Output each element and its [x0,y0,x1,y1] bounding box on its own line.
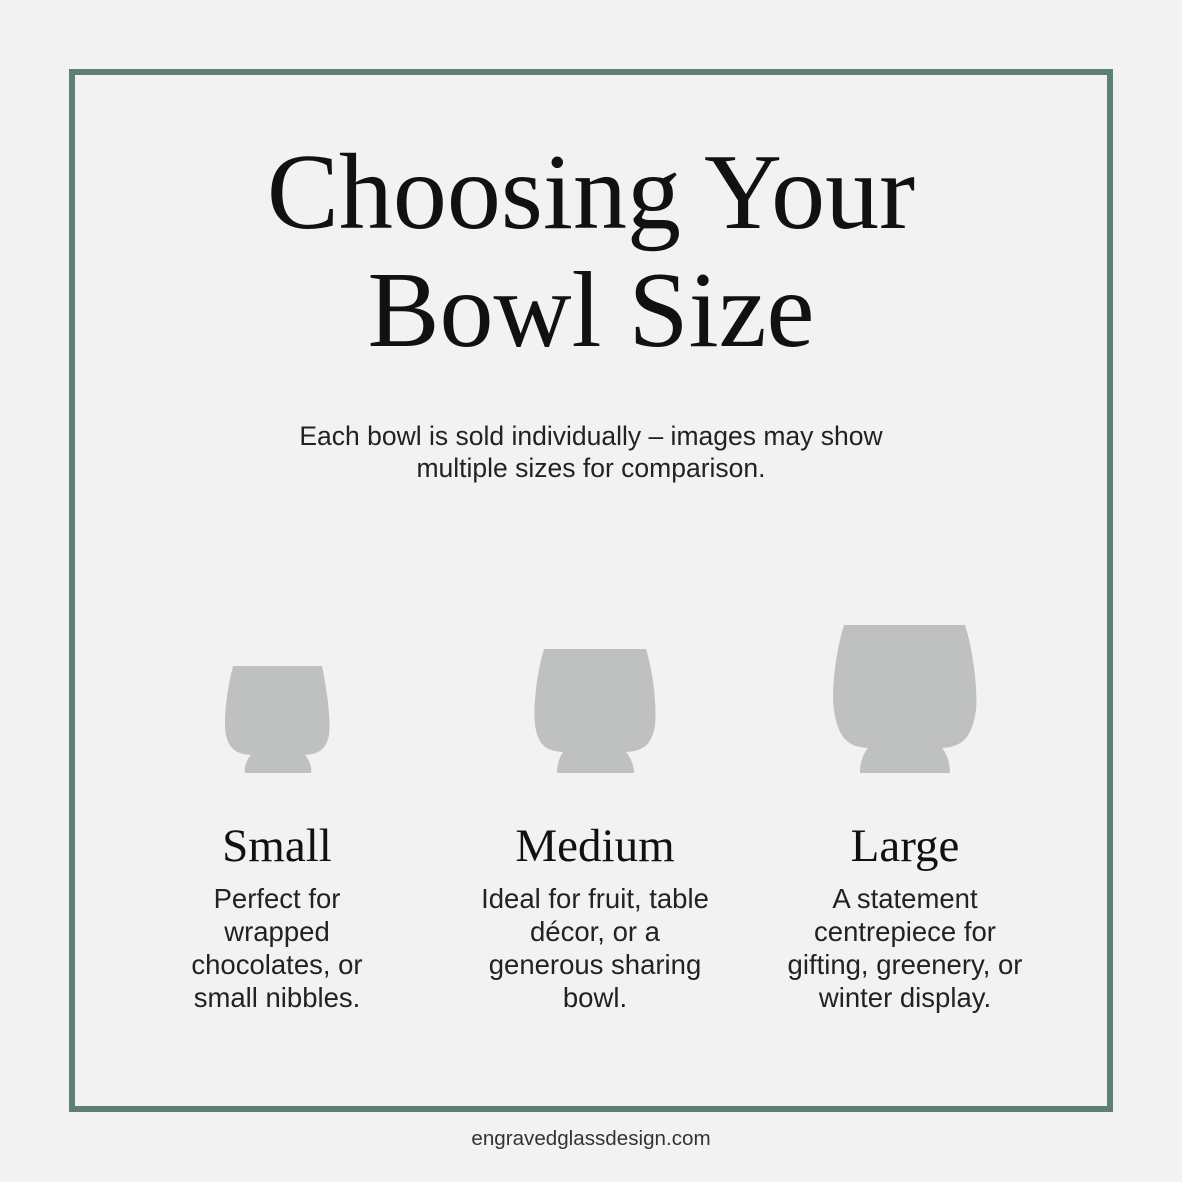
icon: medium bowl [534,649,656,773]
subtitle [299,421,883,483]
footer: engravedglassdesign.com [471,1127,711,1150]
title [267,133,915,370]
icon: large bowl [833,625,976,773]
column: small: chocolates, or [191,949,363,980]
column: large [788,820,1022,1013]
column: small: Perfect for [214,883,340,914]
subtitle: multiple sizes for comparison. [416,453,766,483]
subtitle: Each bowl is sold individually – images may show [299,421,883,451]
column: medium [481,820,709,1013]
column: large: gifting, greenery, or [788,949,1022,980]
column: medium: décor, or a [530,916,660,947]
frame border [69,69,1113,1112]
column: large: A statement [832,883,978,914]
column: small: Small [222,820,332,872]
column: medium: generous sharing [489,949,701,980]
column: medium: Medium [515,820,675,872]
column: medium: Ideal for fruit, table [481,883,709,914]
column: small [191,820,363,1013]
column: small: wrapped [224,916,330,947]
title: Choosing Your [267,133,915,252]
column: small: small nibbles. [194,982,360,1013]
column: large: Large [851,820,959,872]
column: large: winter display. [819,982,991,1013]
icon: small bowl [225,666,330,773]
column: large: centrepiece for [814,916,996,947]
title: Bowl Size [368,251,814,370]
column: medium: bowl. [563,982,627,1013]
